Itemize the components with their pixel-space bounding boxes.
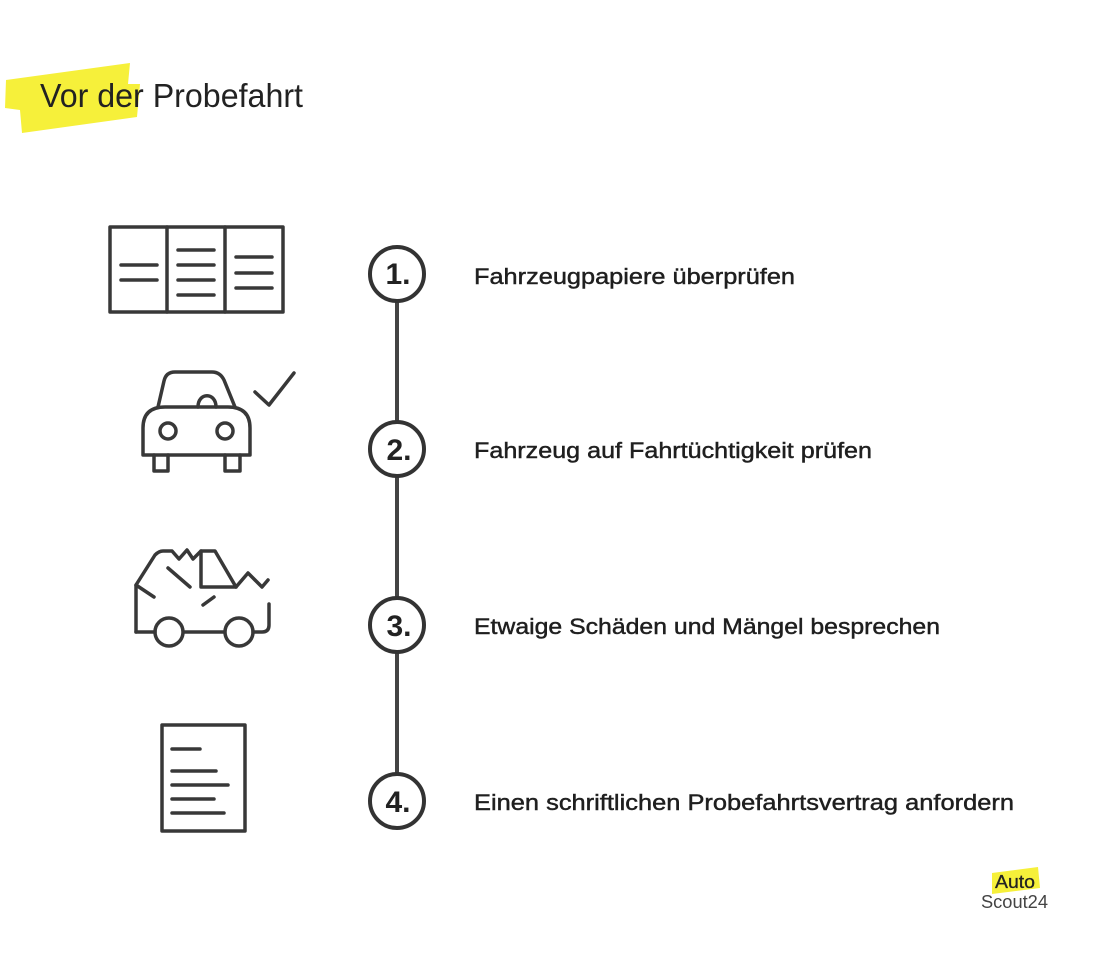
step 1 number badge [370,247,424,301]
logo: AutoScout24: Scout24 [981,892,1048,912]
logo: AutoScout24: Auto [995,872,1035,892]
timeline connector [395,300,399,776]
icon: damaged car [136,550,269,646]
step 1 label: Fahrzeugpapiere überprüfen [474,264,795,289]
step 2 number badge: 2. [386,434,412,467]
step 2 label: Fahrzeug auf Fahrtüchtigkeit prüfen [474,438,872,463]
icon: car with check mark [143,372,294,471]
step 4 [370,774,1014,828]
step 1 [370,247,795,301]
step 4 number badge [370,774,424,828]
logo: AutoScout24 [981,867,1048,912]
icon: written contract [162,725,245,831]
step 2 [370,422,872,476]
step 4 label: Einen schriftlichen Probefahrtsvertrag anfordern [474,790,1014,815]
step 3 [370,598,940,652]
step 3 number badge [370,598,424,652]
step 1 number badge: 1. [385,258,411,291]
title [5,63,303,133]
step 2 number badge [370,422,424,476]
title text: Vor der Probefahrt [40,77,303,114]
step 4 number badge: 4. [385,786,411,819]
step 3 label: Etwaige Schäden und Mängel besprechen [474,614,940,639]
step 3 number badge: 3. [386,610,412,643]
title highlight brush [5,63,140,133]
icon: vehicle papers [110,227,283,312]
